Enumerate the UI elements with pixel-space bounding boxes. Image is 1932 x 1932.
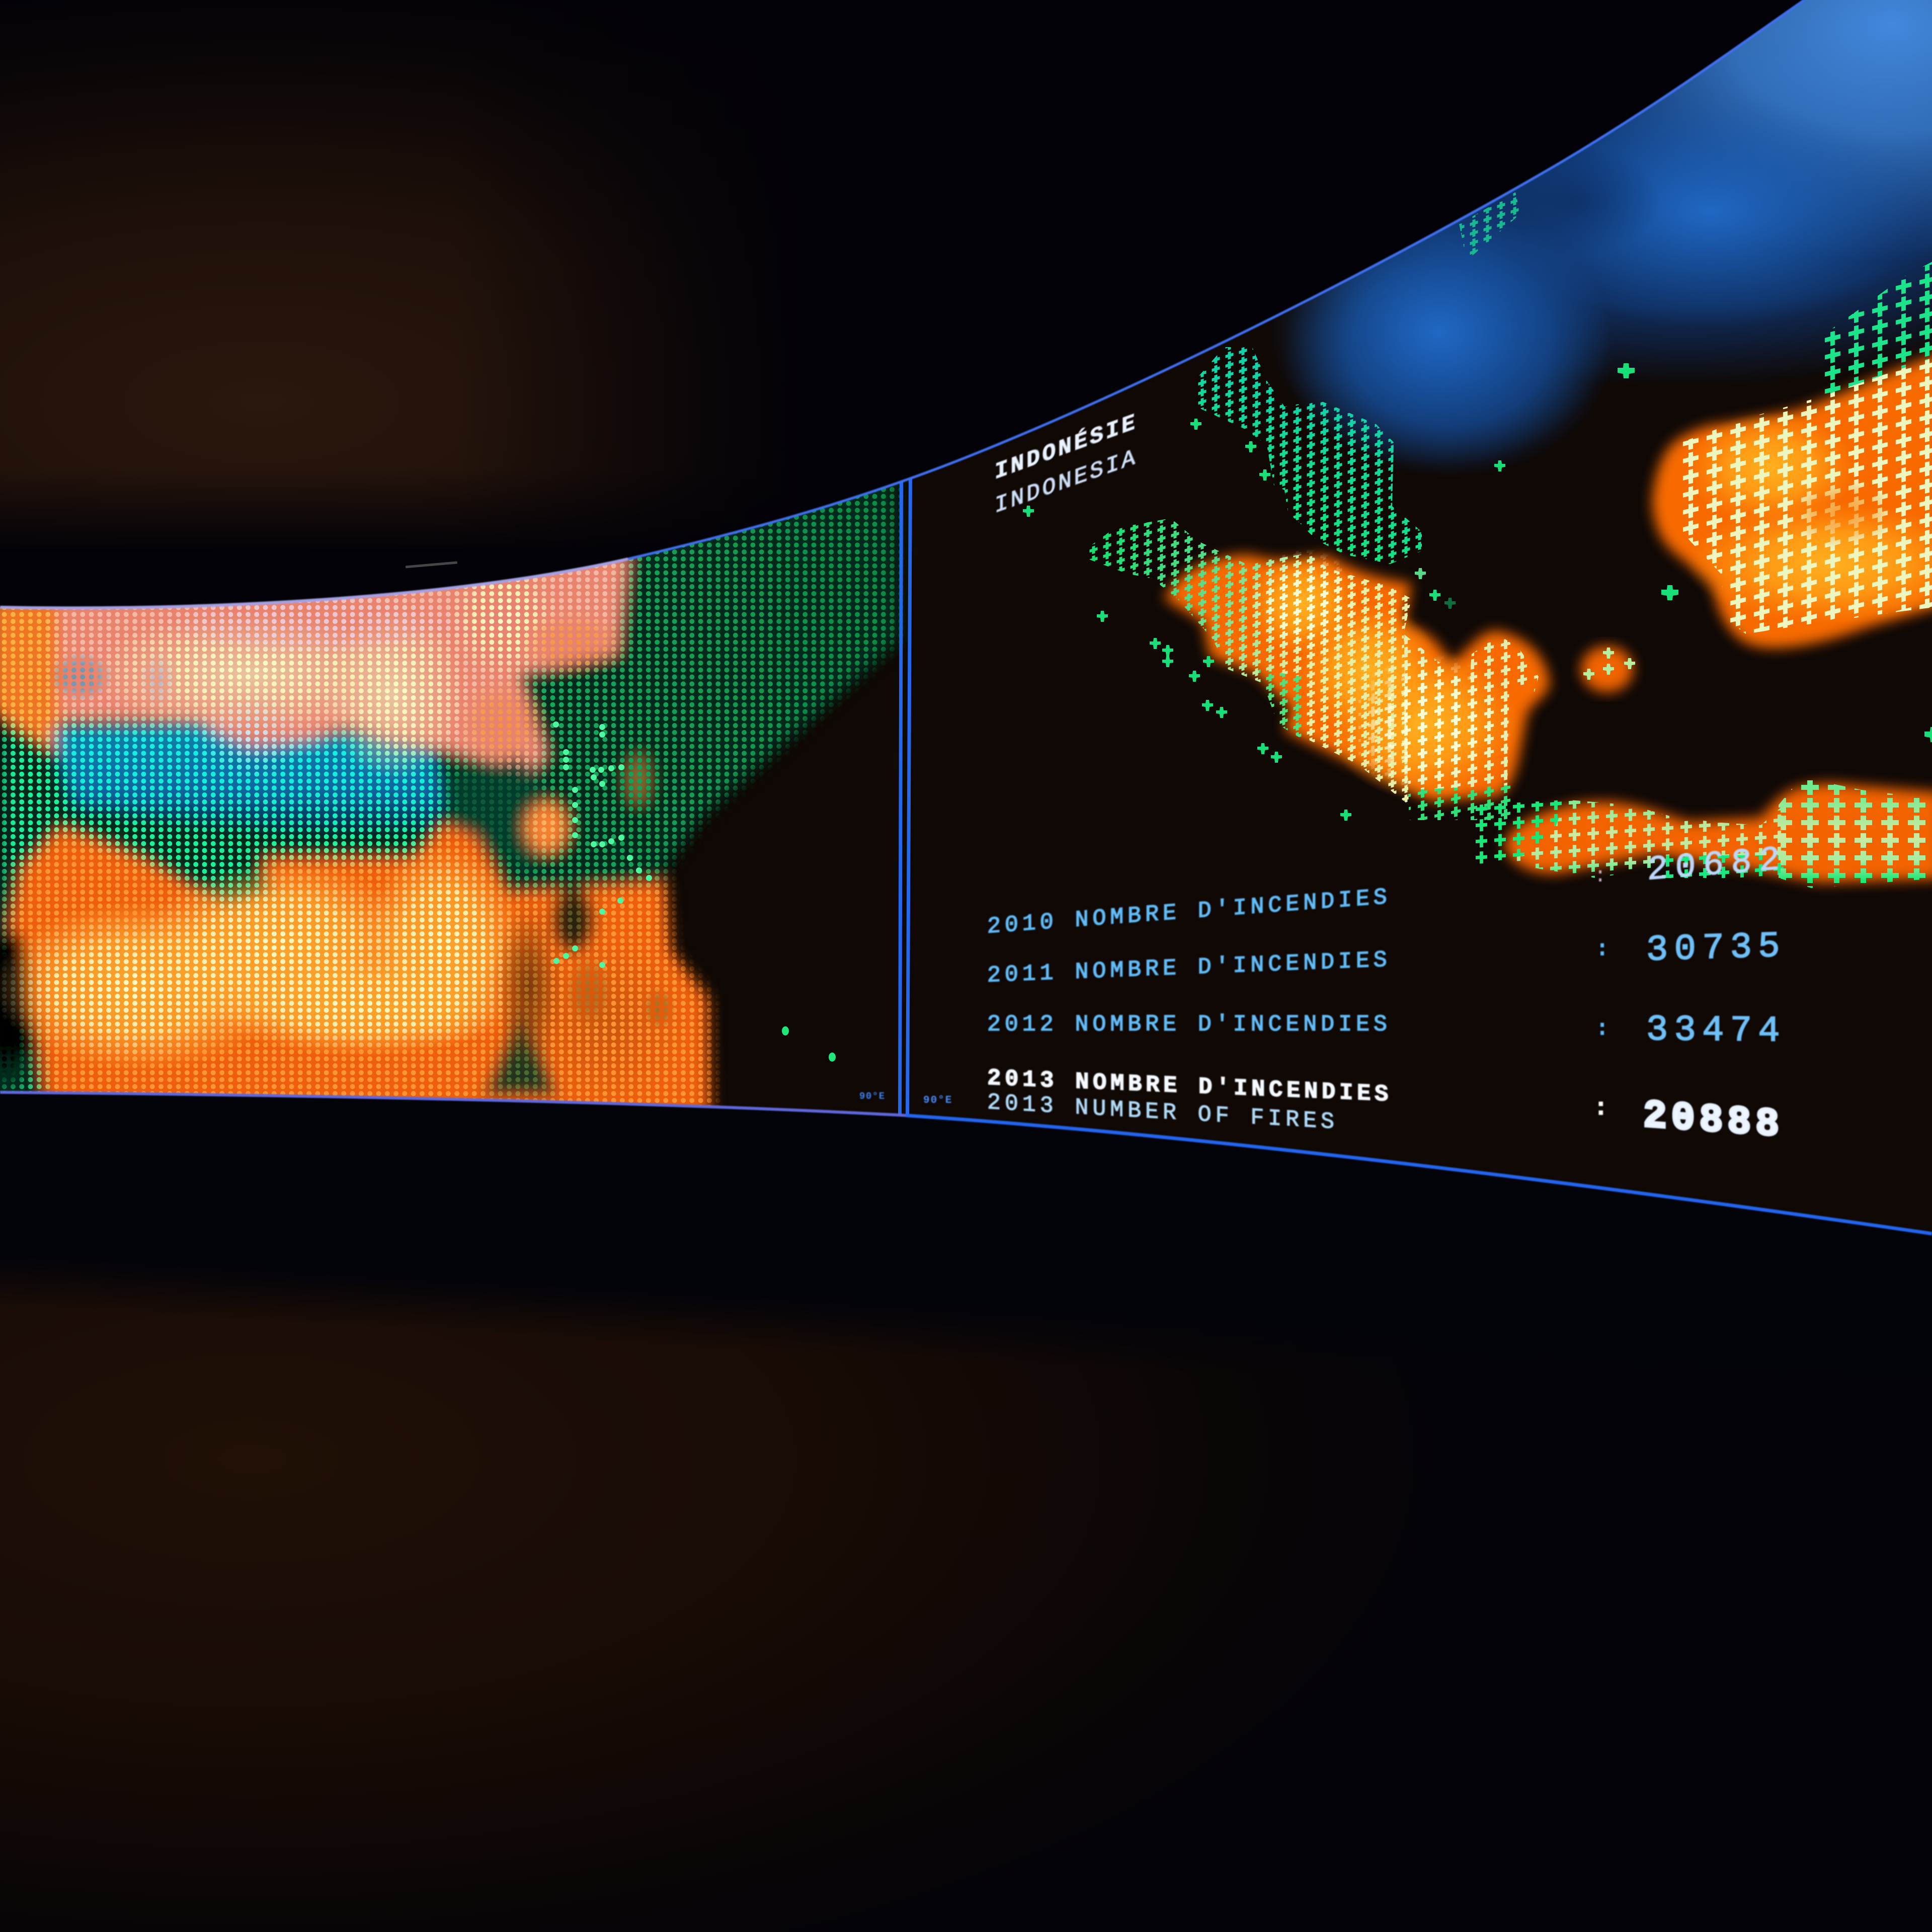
value 2012: : bbox=[1596, 1017, 1608, 1041]
panel divider lines bbox=[898, 476, 912, 1117]
Sumatra west dot matrix bbox=[1087, 518, 1411, 805]
island: Java fire glow bbox=[1504, 783, 1932, 883]
Sumatra hot core bbox=[1248, 553, 1519, 800]
shadow band above the screen bbox=[0, 468, 805, 553]
small island dots bbox=[1583, 648, 1635, 680]
scattered small-island dots bbox=[1023, 363, 1932, 821]
Sumatra east dot matrix bbox=[1343, 634, 1539, 820]
map glow layer bbox=[0, 463, 901, 1117]
row 2011 label: 2011 NOMBRE D'INCENDIES bbox=[987, 947, 1391, 989]
Java dot matrix east bbox=[1779, 777, 1932, 888]
panel: right Indonesia map bbox=[923, 192, 1932, 1148]
heading: INDONESIA: INDONESIA bbox=[995, 444, 1137, 520]
heading: INDONÉSIE: INDONÉSIE bbox=[995, 409, 1137, 486]
Java dot matrix west bbox=[1474, 800, 1784, 878]
value 2013 highlighted: 20888 bbox=[1643, 1094, 1784, 1148]
row 2010 label: 2010 NOMBRE D'INCENDIES bbox=[987, 884, 1391, 940]
value 2010: 20682 bbox=[1647, 840, 1787, 890]
coordinate label right: 90°E bbox=[923, 1095, 952, 1106]
row 2012 label: 2012 NOMBRE D'INCENDIES bbox=[987, 1012, 1391, 1037]
panel: left fire and vegetation map bbox=[0, 463, 901, 1117]
screen bottom edge bbox=[0, 1092, 1932, 1234]
blue cloud haze top right bbox=[1233, 0, 1932, 478]
value 2013 highlighted: : bbox=[1594, 1095, 1608, 1121]
map warm underglow bbox=[0, 609, 689, 1107]
floor with warm reflection bbox=[0, 1087, 1932, 1932]
island: Sumatra fire glow bbox=[1164, 554, 1550, 801]
Borneo hot core bbox=[1685, 413, 1932, 624]
bright green scatter dots bbox=[553, 721, 652, 968]
ceiling fixture dash bbox=[406, 561, 457, 568]
row 2013 English label: 2013 NUMBER OF FIRES bbox=[987, 1090, 1338, 1136]
value 2011: : bbox=[1596, 937, 1608, 961]
curved screen bbox=[0, 0, 1932, 1258]
fade of the wall toward the right bbox=[453, 0, 805, 755]
small island glow bbox=[1581, 646, 1633, 692]
island: Malay peninsula dots bbox=[1196, 347, 1422, 564]
Borneo dot matrix bbox=[1680, 257, 1932, 634]
island: Borneo fire glow bbox=[1652, 352, 1932, 648]
dim green fragment in cloud bbox=[1459, 192, 1520, 261]
dark right part of the wall bbox=[805, 0, 1932, 755]
isolated fire points bbox=[782, 1026, 836, 1062]
value 2012: 33474 bbox=[1646, 1009, 1786, 1052]
value 2010: : bbox=[1594, 864, 1606, 888]
value 2011: 30735 bbox=[1646, 926, 1786, 971]
dark strip behind the screen top bbox=[0, 553, 805, 654]
coordinate label left: 90°E bbox=[859, 1091, 886, 1102]
screen base bbox=[670, 303, 1932, 1232]
screen top edge bbox=[0, 0, 1804, 608]
map dot-matrix layer bbox=[0, 463, 898, 1117]
back wall with warm haze bbox=[0, 0, 1932, 755]
cream highlights in dots bbox=[0, 558, 676, 1064]
dark plinth under the screen bbox=[0, 1006, 1932, 1414]
row 2013 label highlighted: 2013 NOMBRE D'INCENDIES bbox=[987, 1065, 1392, 1108]
